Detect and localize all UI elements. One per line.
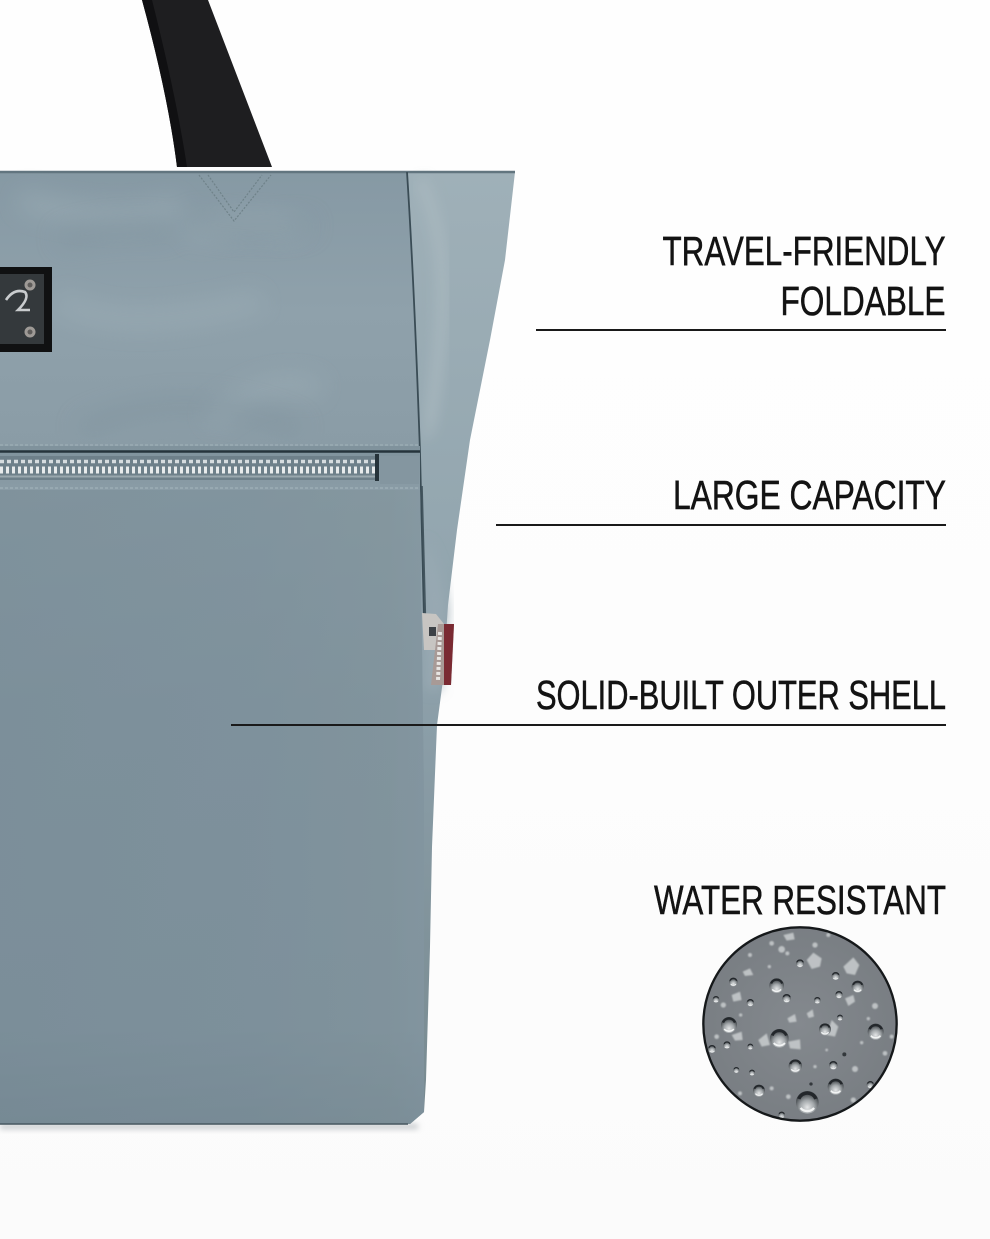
icon: water droplets fabric swatch bbox=[703, 927, 897, 1121]
side gusset bbox=[405, 172, 515, 1124]
leader line bbox=[231, 724, 946, 726]
leader line bbox=[496, 524, 946, 526]
zipper band bbox=[0, 445, 420, 490]
lower front pocket bbox=[0, 486, 426, 1124]
zipper pull bbox=[422, 613, 454, 685]
bag ground shadow bbox=[0, 1124, 418, 1129]
upper front panel bbox=[0, 172, 515, 452]
bag handle strap bbox=[142, 0, 272, 167]
stitched V tab bbox=[199, 175, 271, 221]
leader line bbox=[536, 329, 946, 331]
callout: water resistant bbox=[654, 877, 946, 1121]
callout: travel-friendly foldable bbox=[536, 228, 946, 331]
tote bag photo bbox=[0, 0, 515, 1129]
heading: foldable: FOLDABLE bbox=[780, 278, 946, 324]
brand label patch bbox=[0, 267, 52, 352]
side seam bbox=[407, 172, 426, 640]
